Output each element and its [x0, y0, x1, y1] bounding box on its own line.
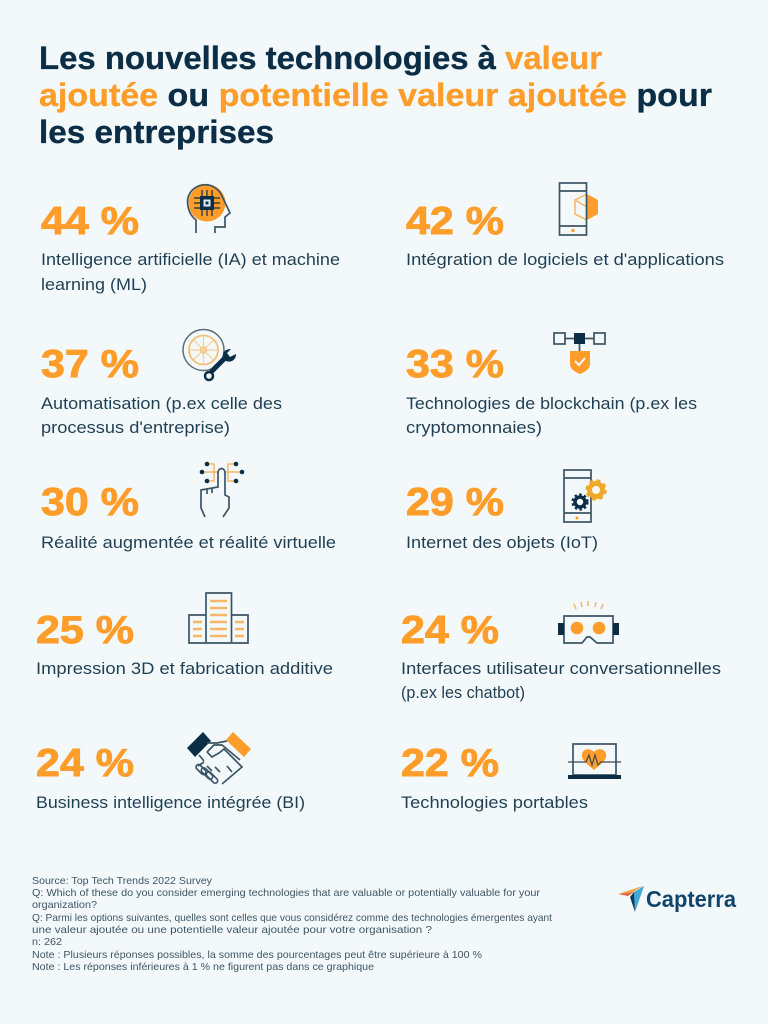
stat: 44 % intelligence artificielle: Intelligence artificielle (IA) et machine — [41, 250, 340, 269]
source notes: Note : Les réponses inférieures à 1 % ne figurent pas dans ce graphique — [32, 962, 374, 973]
source notes — [32, 876, 552, 973]
stat: 44 % intelligence artificielle — [41, 200, 340, 294]
title — [39, 40, 712, 150]
stat: 24 % business intelligence — [36, 742, 305, 812]
source notes: Q: Parmi les options suivantes, quelles sont celles que vous considérez comme des technologies émergentes ayant — [32, 913, 552, 924]
stat: 42 % integration: Intégration de logiciels et d'applications — [406, 250, 724, 269]
stat: 22 % technologies portables: Technologies portables — [401, 793, 588, 812]
stat: 33 % blockchain: Technologies de blockchain (p.ex les — [406, 394, 697, 413]
stat: 24 % interfaces conversationnelles: (p.ex les chatbot) — [401, 683, 525, 702]
stat: 37 % automatisation: Automatisation (p.ex celle des — [41, 394, 282, 413]
stat: 24 % business intelligence: Business intelligence intégrée (BI) — [36, 793, 305, 812]
stat: 24 % business intelligence: 24 % — [36, 742, 134, 785]
icon: laptop with heart — [568, 744, 621, 779]
stat: 24 % interfaces conversationnelles: Interfaces utilisateur conversationnelles — [401, 659, 721, 678]
logo: Capterra: Capterra — [646, 886, 736, 912]
stat: 29 % internet des objets — [406, 481, 598, 552]
stat: 25 % impression 3D — [36, 609, 333, 678]
stat: 25 % impression 3D: 25 % — [36, 609, 134, 652]
stat: 33 % blockchain: 33 % — [406, 343, 504, 386]
stat: 30 % realite augmentee: 30 % — [41, 481, 139, 524]
icon: finger with nodes — [200, 462, 244, 517]
source notes: Note : Plusieurs réponses possibles, la somme des pourcentages peut être supérieure à 100 % — [32, 950, 482, 961]
stat: 44 % intelligence artificielle: 44 % — [41, 200, 139, 243]
stat: 22 % technologies portables — [401, 742, 588, 812]
source notes: une valeur ajoutée ou une potentielle valeur ajoutée pour votre organisation ? — [32, 925, 432, 936]
icon: block nodes with shield — [554, 333, 605, 374]
title: Les nouvelles technologies à valeur — [39, 40, 602, 76]
icon: VR headset — [558, 601, 619, 643]
source notes: n: 262 — [32, 937, 62, 948]
stat: 30 % realite augmentee: Réalité augmentée et réalité virtuelle — [41, 533, 336, 552]
icon: handshake — [187, 732, 251, 784]
stat: 29 % internet des objets: 29 % — [406, 481, 504, 524]
stat: 22 % technologies portables: 22 % — [401, 742, 499, 785]
stat: 24 % interfaces conversationnelles — [401, 609, 721, 702]
icon: buildings — [189, 593, 248, 643]
stat: 42 % integration — [406, 200, 724, 269]
stat: 44 % intelligence artificielle: learning (ML) — [41, 275, 147, 294]
icon: head with chip — [188, 184, 230, 233]
stat: 37 % automatisation: processus d'entreprise) — [41, 418, 230, 437]
icon: wheel and wrench — [183, 330, 236, 380]
source notes: organization? — [32, 900, 97, 911]
stat: 33 % blockchain: cryptomonnaies) — [406, 418, 542, 437]
stat: 25 % impression 3D: Impression 3D et fabrication additive — [36, 659, 333, 678]
source notes: Source: Top Tech Trends 2022 Survey — [32, 876, 213, 887]
source notes: Q: Which of these do you consider emerging technologies that are valuable or potentially valuable for your — [32, 888, 541, 899]
icon: phone with cube — [560, 183, 598, 235]
stat: 37 % automatisation: 37 % — [41, 343, 139, 386]
title: ajoutée ou potentielle valeur ajoutée pour — [39, 77, 712, 113]
title: les entreprises — [39, 114, 274, 150]
icon: phone with gears — [564, 470, 606, 522]
stat: 29 % internet des objets: Internet des objets (IoT) — [406, 533, 598, 552]
stat: 33 % blockchain — [406, 343, 697, 437]
stat: 37 % automatisation — [41, 343, 282, 437]
stat: 24 % interfaces conversationnelles: 24 % — [401, 609, 499, 652]
stat: 30 % realite augmentee — [41, 481, 336, 552]
stat: 42 % integration: 42 % — [406, 200, 504, 243]
